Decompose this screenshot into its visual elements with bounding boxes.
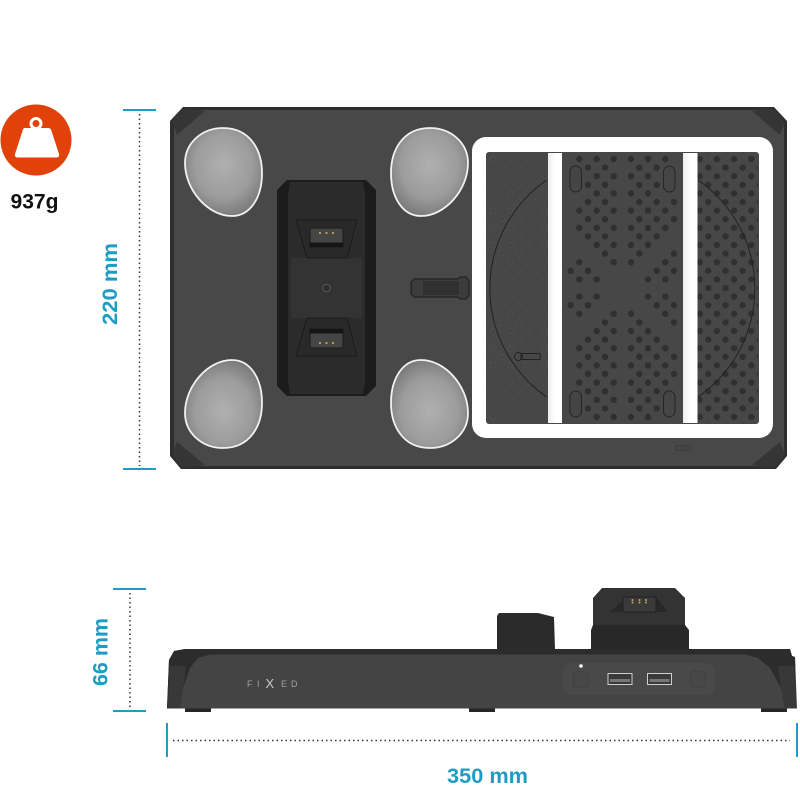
side view of the stand	[167, 588, 797, 712]
dimension: width 350 mm: 350 mm	[447, 765, 528, 788]
weight badge	[0, 104, 72, 214]
body	[170, 107, 787, 469]
weight value: 937g	[10, 190, 58, 214]
brand	[247, 676, 298, 691]
charging dock	[277, 180, 376, 396]
suction cups	[185, 128, 468, 448]
brand: I	[257, 679, 260, 689]
dimension: height 66 mm: 66 mm	[90, 618, 112, 686]
top view of the stand	[170, 107, 787, 469]
left perforations	[487, 153, 548, 423]
brand: F	[247, 679, 253, 689]
underside notch	[675, 446, 692, 450]
oval slots	[570, 166, 675, 417]
right perforations	[697, 153, 758, 423]
feet	[185, 707, 787, 712]
white frame with perforated plate	[472, 137, 773, 438]
brand: D	[291, 679, 298, 689]
centre perforations	[571, 159, 674, 417]
cable slot	[411, 277, 469, 299]
dimension: height 66 mm	[90, 589, 146, 711]
port panel	[563, 663, 715, 695]
light strips	[548, 153, 562, 423]
dimension: height 220 mm: 220 mm	[99, 243, 122, 325]
disc latch	[514, 352, 540, 360]
holder block	[497, 613, 555, 650]
brand: E	[281, 679, 287, 689]
rotating disc outline	[490, 180, 755, 397]
charger on side view	[591, 588, 689, 650]
brand: X	[266, 676, 274, 691]
icon: weight	[0, 104, 72, 176]
base	[167, 649, 797, 708]
